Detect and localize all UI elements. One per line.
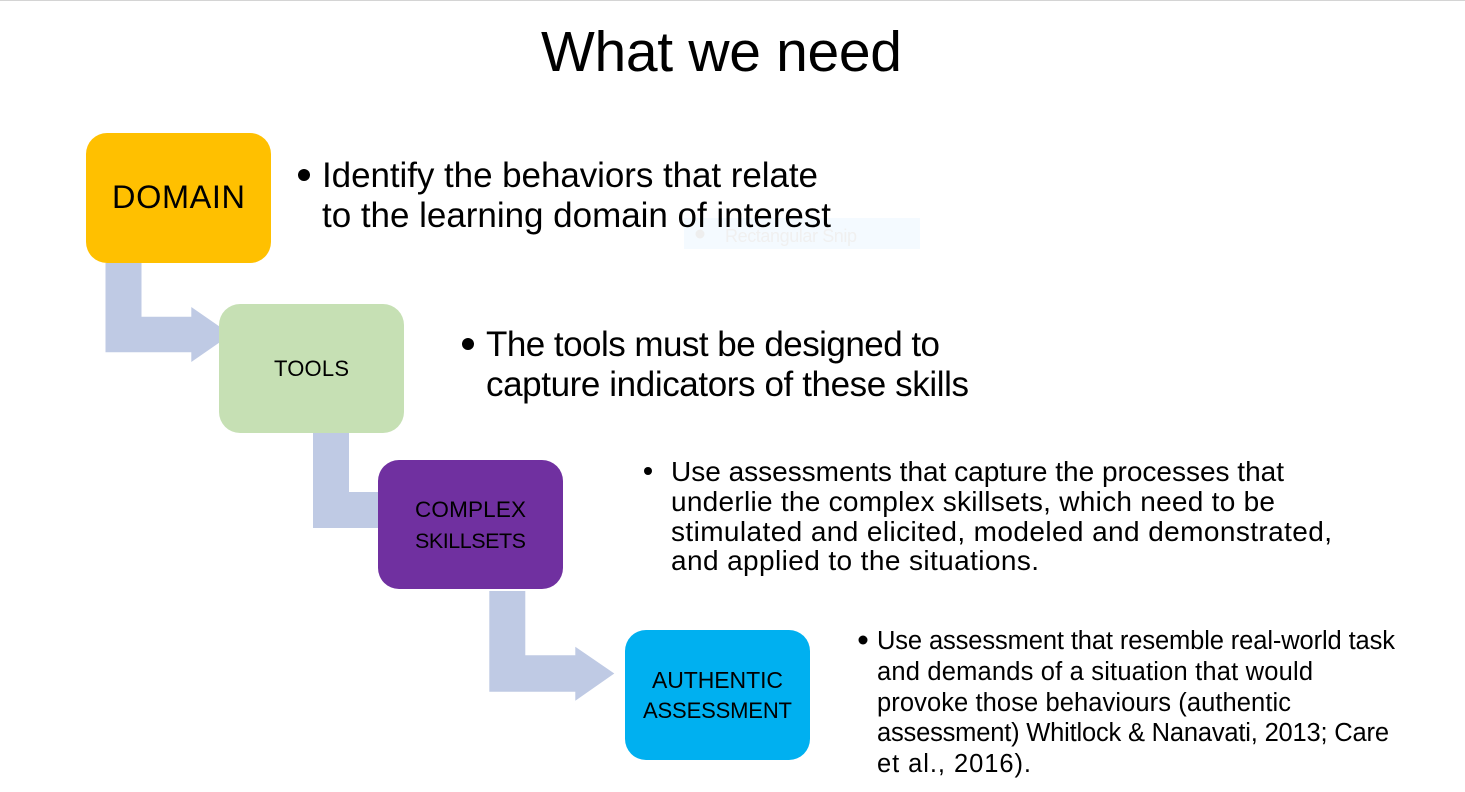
text block: domain bullet: Identify the behaviors that relate: [322, 156, 818, 195]
text block: complex skillsets bullet: underlie the complex skillsets, which need to be: [671, 486, 1275, 517]
box: complex skillsets: SKILLSETS: [415, 529, 526, 553]
text block: tools bullet: [462, 325, 969, 404]
text block: tools bullet: capture indicators of these skills: [486, 365, 969, 404]
faint snip tool label: [684, 218, 920, 249]
text block: authentic assessment bullet: and demands of a situation that would: [877, 658, 1313, 686]
box: tools: [219, 304, 404, 433]
arrow: complex skillsets to authentic assessment: [489, 591, 614, 701]
text block: tools bullet: The tools must be designed to: [486, 325, 940, 364]
box: authentic assessment: ASSESSMENT: [643, 698, 792, 723]
box: authentic assessment: [625, 630, 810, 760]
box: authentic assessment: AUTHENTIC: [652, 667, 783, 693]
box: domain: DOMAIN: [112, 179, 245, 215]
title: What we need: [541, 20, 902, 84]
text block: authentic assessment bullet: Use assessment that resemble real-world task: [877, 627, 1395, 655]
text block: domain bullet: to the learning domain of interest: [322, 196, 831, 235]
text block: complex skillsets bullet: Use assessments that capture the processes that: [671, 456, 1284, 487]
box: complex skillsets: COMPLEX: [415, 497, 526, 522]
text block: authentic assessment bullet: provoke those behaviours (authentic: [877, 689, 1291, 717]
text block: complex skillsets bullet: stimulated and elicited, modeled and demonstrated,: [671, 516, 1332, 547]
arrow: tools to complex skillsets: [313, 433, 385, 528]
box: complex skillsets: [378, 460, 563, 589]
text block: authentic assessment bullet: assessment) Whitlock & Nanavati, 2013; Care: [877, 719, 1389, 747]
arrow: domain to tools: [106, 263, 231, 362]
box: domain: [86, 133, 271, 263]
text block: authentic assessment bullet: [858, 627, 1395, 778]
text block: complex skillsets bullet: and applied to the situations.: [671, 545, 1039, 576]
text block: domain bullet: [298, 156, 831, 235]
faint snip tool label: Rectangular Snip: [725, 226, 857, 246]
text block: authentic assessment bullet: et al., 2016).: [877, 750, 1031, 778]
box: tools: TOOLS: [274, 356, 349, 381]
text block: complex skillsets bullet: [644, 456, 1332, 576]
